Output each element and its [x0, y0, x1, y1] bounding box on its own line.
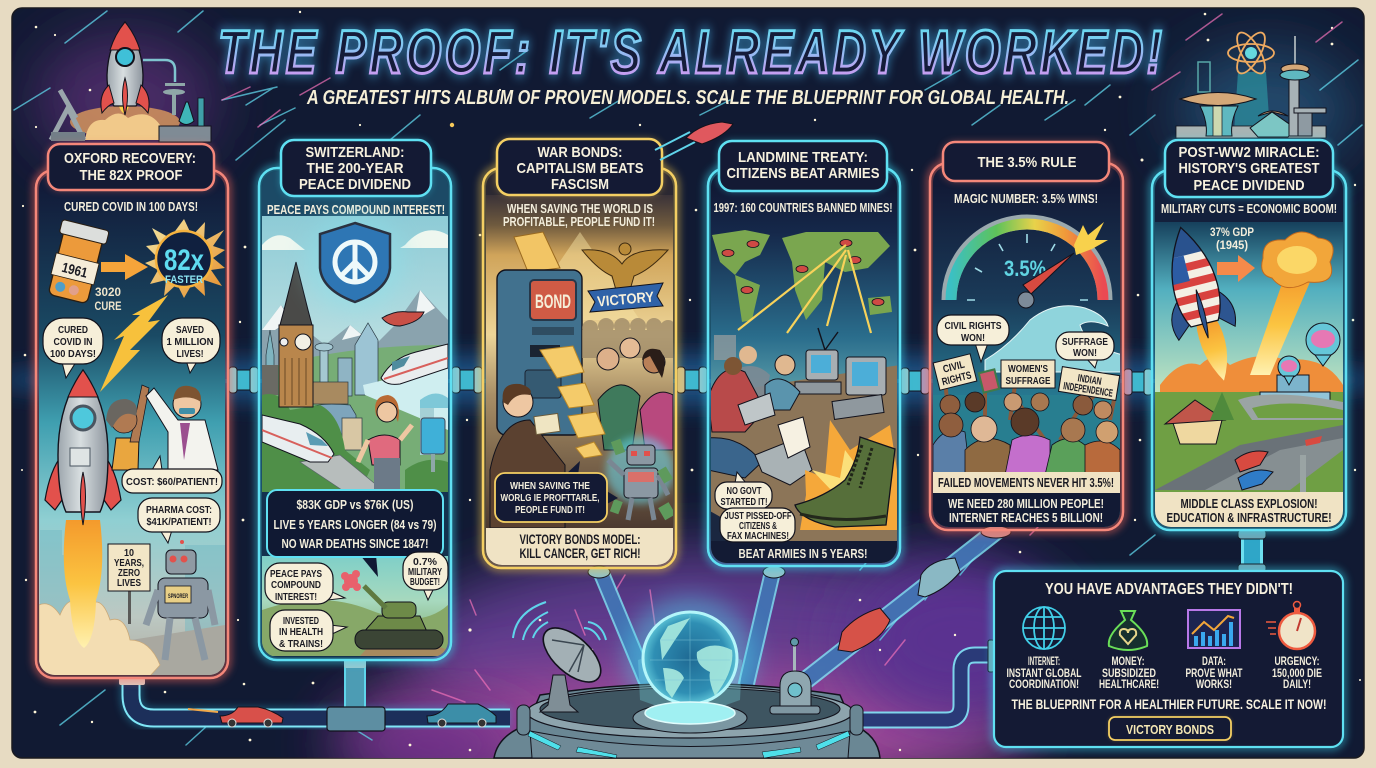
heading: Switzerland: SWITZERLAND: — [306, 144, 404, 161]
illustration: antenna tower — [770, 638, 820, 714]
heading: War Bonds: FASCISM — [551, 176, 609, 193]
speech bubble: military budget: 0.7% — [413, 556, 438, 568]
illustration: city towers — [262, 323, 448, 492]
label: data: PROVE WHAT — [1186, 668, 1242, 680]
protest sign: civil rights: CIVIL — [942, 359, 966, 376]
speech bubble: cured covid: 100 DAYS! — [50, 348, 96, 360]
illustration: victory banner — [588, 283, 663, 312]
tagline: magic number: MAGIC NUMBER: 3.5% WINS! — [954, 192, 1098, 206]
illustration: bond machine: BOND — [535, 292, 571, 313]
label: data: WORKS! — [1196, 679, 1232, 691]
speech bubble: no govt: STARTED IT! — [720, 496, 768, 508]
gauge: 3.5%: 3.5% — [1004, 256, 1046, 281]
speech bubble: military budget — [403, 552, 448, 600]
stat: 3020 cure: CURE — [94, 299, 122, 313]
heading: Landmine Treaty — [726, 149, 880, 182]
illustration: clock tower — [279, 262, 313, 407]
speech bubble: cured covid: CURED — [58, 324, 88, 336]
label: urgency: URGENCY: — [1274, 656, 1320, 668]
vehicle: blue car on pipe — [427, 704, 496, 727]
icon: pill bottle 1961 — [44, 219, 109, 305]
stat: 37% GDP: (1945) — [1216, 238, 1248, 252]
arrow: GDP to boom — [1217, 255, 1255, 282]
lower pipe network and light beams — [119, 526, 1266, 731]
speech bubble: saved lives: 1 MILLION — [166, 336, 214, 348]
arrow: to 82x — [101, 254, 148, 280]
callout: saving the world: WORLG IE PROFTTARLE, — [500, 492, 600, 504]
protest sign: women's suffrage: SUFFRAGE — [1006, 375, 1050, 387]
illustration: ground and neighbourhood — [1155, 375, 1343, 492]
speech bubble: civil rights won: CIVIL RIGHTS — [944, 320, 1002, 332]
label: money: HEALTHCARE! — [1099, 679, 1159, 691]
flying car: teal on beam — [918, 558, 960, 597]
illustration: world map with mines — [712, 230, 892, 333]
text: we need 280 million: INTERNET REACHES 5 BILLION! — [949, 510, 1103, 525]
illustration: cheering crowd — [933, 380, 1120, 475]
tagline: peace pays: PEACE PAYS COMPOUND INTEREST! — [267, 203, 445, 217]
icon: small brain pin — [1278, 356, 1300, 385]
protest sign: Indian independence: INDEPENDENCE — [1062, 380, 1114, 400]
speech bubble: no govt: NO GOVT — [726, 485, 762, 497]
caption: victory bonds model — [520, 532, 640, 561]
speech bubble: peace pays: COMPOUND — [271, 579, 321, 591]
tagline: when saving the world: PROFITABLE, PEOPLE FUND IT! — [503, 215, 655, 229]
callout: saving the world: PEOPLE FUND IT! — [515, 504, 585, 516]
speech bubble: cured covid — [43, 318, 103, 378]
speech bubble: suffrage won: WON! — [1073, 347, 1097, 359]
illustration: hologram globe on platform — [494, 596, 880, 758]
icon: pill bottle 1961: 1961 — [60, 259, 90, 281]
label: money: MONEY: — [1112, 656, 1144, 668]
illustration: large rocket — [45, 370, 121, 648]
icon: stopwatch — [1266, 602, 1315, 649]
illustration: exploding boot — [795, 420, 897, 530]
icon: peace shield — [307, 214, 403, 310]
illustration: pharma robot and sign: YEARS, — [114, 557, 144, 569]
callout: saving the world: WHEN SAVING THE — [510, 480, 590, 492]
heading: Switzerland: PEACE DIVIDEND — [299, 176, 411, 193]
flying car: top streak — [655, 122, 733, 160]
heading: Oxford Recovery — [64, 150, 196, 184]
illustration: crowd with bonds — [582, 318, 676, 450]
illustration: futuristic city and atom — [1176, 29, 1326, 138]
illustration: satellite dish and radio waves — [513, 602, 610, 712]
heading: Landmine Treaty: LANDMINE TREATY: — [738, 149, 868, 166]
tagline: cured covid: CURED COVID IN 100 DAYS! — [64, 200, 198, 214]
illustration: pharma robot and sign: 10 — [124, 547, 134, 559]
illustration: man holding bond — [490, 384, 565, 528]
speech bubble: saved lives — [162, 318, 220, 373]
speech bubble: peace pays: INTEREST! — [275, 591, 317, 603]
heading: War Bonds: WAR BONDS: — [538, 144, 622, 161]
vehicle: red car on pipe — [188, 707, 283, 727]
heading: Post-WW2 Miracle: POST-WW2 MIRACLE: — [1178, 144, 1320, 161]
tagline: when saving the world: WHEN SAVING THE WORLD IS — [507, 202, 653, 216]
text: we need 280 million — [948, 496, 1104, 525]
panel 3: War Bonds — [483, 139, 676, 568]
heading: War Bonds: CAPITALISM BEATS — [516, 160, 644, 177]
speech bubble: invested: & TRAINS! — [279, 638, 323, 650]
heading: advantages: YOU HAVE ADVANTAGES THEY DIDN'T! — [1045, 581, 1293, 598]
text: we need 280 million: WE NEED 280 MILLION PEOPLE! — [948, 496, 1104, 511]
illustration: ticket strip — [514, 232, 560, 272]
illustration: small robot — [606, 436, 676, 520]
illustration: victory banner: VICTORY — [597, 290, 655, 310]
heading: Oxford Recovery: OXFORD RECOVERY: — [64, 150, 196, 167]
speech bubble: pissed-off citizens: JUST PISSED-OFF — [724, 510, 792, 522]
speech bubble: military budget: MILITARY — [408, 566, 442, 578]
speech bubble: invested: INVESTED — [283, 615, 319, 627]
label: data: DATA: — [1202, 656, 1226, 668]
title: THE PROOF: IT'S ALREADY WORKED! — [218, 19, 1162, 87]
label: urgency: 150,000 DIE — [1272, 668, 1322, 680]
heading: 3.5% rule: THE 3.5% RULE — [978, 154, 1076, 171]
illustration: flying car — [382, 312, 424, 326]
icon: 82x faster burst — [100, 219, 225, 392]
label: urgency — [1272, 656, 1322, 691]
speech bubble: no govt — [715, 472, 772, 509]
illustration: woman — [358, 395, 412, 492]
panel: advantages — [994, 571, 1343, 747]
label: internet: COORDINATION! — [1009, 679, 1079, 691]
speech bubble: pissed-off citizens — [720, 508, 795, 542]
heading: War Bonds — [516, 144, 644, 193]
button: victory bonds — [1109, 717, 1231, 740]
protest sign: women's suffrage: WOMEN'S — [1008, 363, 1048, 375]
speech bubble: cost — [122, 456, 222, 493]
caption: failed movements: FAILED MOVEMENTS NEVER HIT 3.5%! — [938, 475, 1114, 490]
heading: Switzerland: THE 200-YEAR — [306, 160, 404, 177]
illustration: lower train — [262, 415, 334, 462]
button: victory bonds: VICTORY BONDS — [1126, 722, 1214, 737]
illustration: falling bonds — [540, 346, 605, 458]
heading: Oxford Recovery: THE 82X PROOF — [80, 167, 182, 184]
callout: Swiss stats — [267, 490, 443, 577]
callout: saving the world — [495, 461, 618, 522]
panel 4: Landmine Treaty — [708, 141, 900, 570]
label: internet: INTERNET: — [1028, 656, 1060, 668]
caption: middle class: MIDDLE CLASS EXPLOSION! — [1180, 496, 1318, 511]
illustration: kid and doctor high five — [106, 385, 218, 470]
label: money — [1099, 656, 1159, 691]
connector pipes between panels — [228, 367, 1152, 395]
stat: 3020 cure: 3020 — [95, 285, 121, 299]
icon: large brain pin — [1306, 323, 1340, 366]
illustration: pharma robot and sign — [108, 540, 215, 660]
illustration: tank with flower — [341, 570, 443, 649]
icon: data chart — [1188, 610, 1240, 648]
speech bubble: saved lives: SAVED — [176, 324, 204, 336]
protest sign: Indian independence: INDIAN — [1077, 372, 1102, 388]
flying car: red on beam — [838, 608, 890, 652]
speech bubble: invested: IN HEALTH — [279, 626, 323, 638]
heading: Post-WW2 Miracle: PEACE DIVIDEND — [1194, 177, 1305, 194]
callout: Swiss stats: $83K GDP vs $76K (US) — [296, 497, 414, 512]
label: urgency: DAILY! — [1283, 679, 1311, 691]
illustration: pharma robot and sign: LIVES — [117, 577, 141, 589]
speech bubble: saved lives: LIVES! — [176, 348, 204, 360]
illustration: wave — [985, 306, 1123, 372]
illustration: pharma robot and sign: SPNORER — [168, 594, 188, 600]
illustration: upper train — [381, 344, 448, 384]
stat: 3020 cure — [94, 285, 122, 313]
stat: 37% GDP: 37% GDP — [1210, 225, 1254, 239]
icon: 82x faster burst: 82x — [164, 244, 204, 277]
panel 6: Post-WW2 Miracle — [1148, 140, 1346, 530]
speech bubble: suffrage won: SUFFRAGE — [1062, 336, 1108, 348]
panel 5: The 3.5% Rule — [930, 142, 1123, 530]
protest sign: civil rights — [933, 354, 977, 390]
speech bubble: pharma cost: PHARMA COST: — [146, 504, 212, 516]
speech bubble: suffrage won — [1056, 332, 1114, 368]
speech bubble: peace pays: PEACE PAYS — [270, 568, 322, 580]
speech bubble: civil rights won — [937, 315, 1009, 362]
icon: internet globe — [1023, 607, 1065, 649]
speech bubble: pissed-off citizens: CITIZENS & — [739, 520, 777, 532]
caption: victory bonds model: VICTORY BONDS MODEL: — [520, 532, 640, 547]
caption: victory bonds model: KILL CANCER, GET RICH! — [520, 546, 640, 561]
subtitle: A GREATEST HITS ALBUM OF PROVEN MODELS. SCALE THE BLUEPRINT FOR GLOBAL HEALTH. — [306, 87, 1069, 109]
illustration: fax machine and hand — [708, 417, 812, 485]
speech bubble: cured covid: COVID IN — [54, 336, 92, 348]
icon: info kiosk — [421, 418, 445, 472]
speech bubble: peace pays — [265, 563, 345, 604]
protest sign: civil rights: RIGHTS — [941, 369, 973, 388]
illustration: room desk and computers — [708, 328, 900, 570]
illustration: bond machine — [497, 270, 582, 435]
tagline: when saving the world — [503, 202, 655, 229]
speech bubble: civil rights won: WON! — [961, 332, 985, 344]
heading: Post-WW2 Miracle: HISTORY'S GREATEST — [1178, 160, 1320, 177]
title: THE PROOF: IT'S ALREADY WORKED! — [218, 19, 1162, 87]
protest flag — [979, 369, 999, 393]
heading: Switzerland — [299, 144, 411, 193]
caption: beat armies: BEAT ARMIES IN 5 YEARS! — [738, 546, 868, 561]
heading: Post-WW2 Miracle — [1178, 144, 1320, 194]
illustration: flag rocket — [1148, 214, 1250, 390]
speech bubble: pharma cost — [138, 498, 220, 543]
callout: Swiss stats: LIVE 5 YEARS LONGER (84 vs 79) — [274, 517, 436, 532]
tagline: 1997 ban: 1997: 160 COUNTRIES BANNED MINES! — [714, 201, 892, 215]
speech bubble: invested — [270, 610, 347, 651]
speech bubble: pissed-off citizens: FAX MACHINES! — [727, 530, 789, 542]
illustration: explosion — [1160, 232, 1343, 400]
speech bubble: cost: COST: $60/PATIENT! — [126, 476, 218, 488]
illustration: eagle — [582, 243, 668, 290]
callout: Swiss stats: NO WAR DEATHS SINCE 1847! — [282, 536, 428, 551]
label: internet: INSTANT GLOBAL — [1006, 668, 1082, 680]
protest sign: Indian independence — [1058, 367, 1120, 400]
heading: Landmine Treaty: CITIZENS BEAT ARMIES — [726, 165, 880, 182]
speech bubble: pharma cost: $41K/PATIENT! — [146, 516, 212, 528]
illustration: rocket launch and lab bench — [51, 22, 211, 142]
panel 2: Switzerland — [259, 140, 451, 660]
gauge: 3.5% — [949, 222, 1108, 308]
caption: middle class — [1166, 496, 1332, 525]
stat: 37% GDP — [1210, 225, 1254, 252]
panel 1: Oxford Recovery — [36, 144, 228, 678]
protest sign: women's suffrage — [1001, 360, 1055, 388]
icon: 82x faster burst: FASTER — [165, 274, 203, 286]
speech bubble: military budget: BUDGET! — [410, 576, 440, 588]
icon: money bag — [1109, 611, 1147, 650]
label: money: SUBSIDIZED — [1102, 668, 1156, 680]
label: internet — [1006, 656, 1082, 691]
illustration: pharma robot and sign: ZERO — [118, 567, 140, 579]
label: data — [1186, 656, 1242, 691]
